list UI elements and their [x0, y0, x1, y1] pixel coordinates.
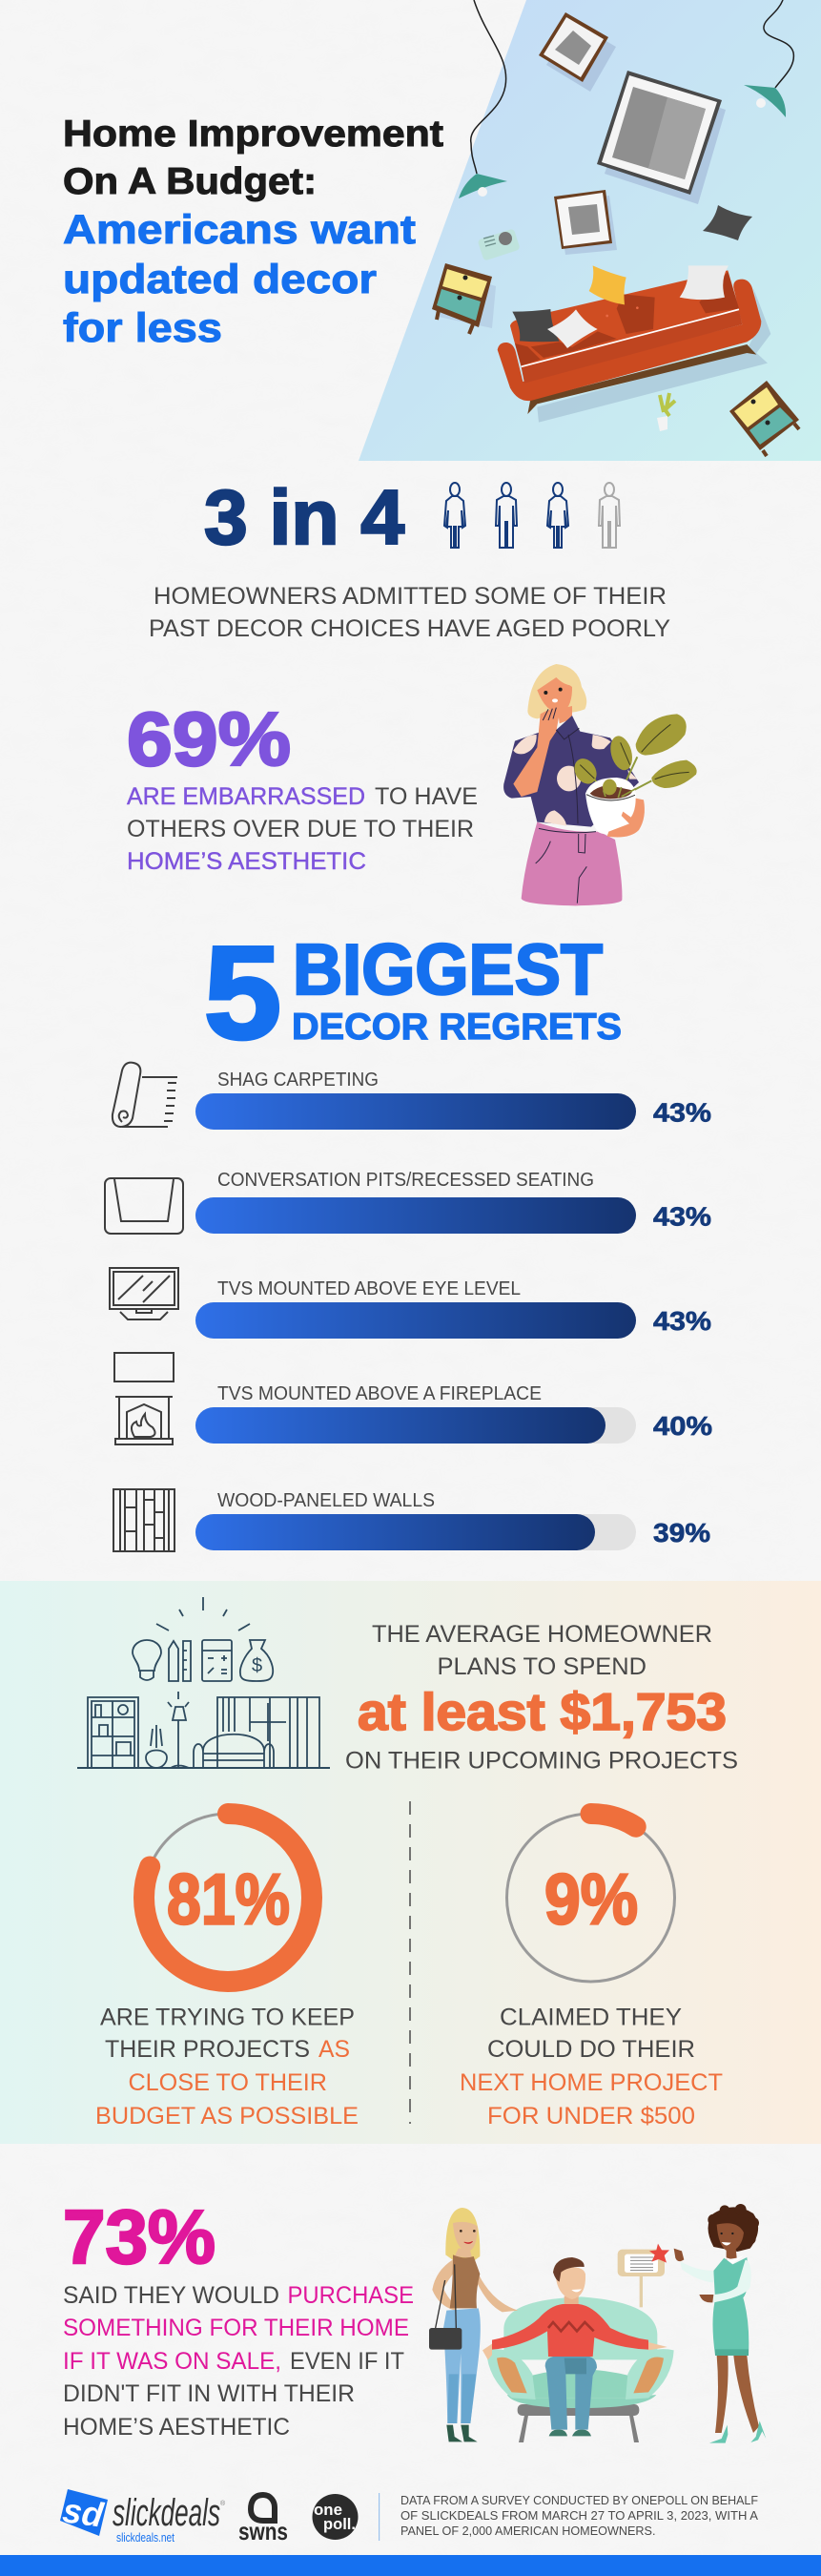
icon: yellow pillow: [589, 265, 626, 304]
text: purchase if on sale: EVEN IF IT: [290, 2348, 404, 2375]
icon: white cushion: [547, 309, 598, 348]
chart: decor regrets bars: [195, 1070, 712, 1550]
icon: cactus pot: [657, 393, 675, 431]
text: survey source: DATA FROM A SURVEY CONDUCTED BY ONEPOLL ON BEHALF: [400, 2494, 758, 2507]
text: next project under 500 dollars: FOR UNDER $500: [487, 2103, 695, 2129]
text: purchase if on sale: SOMETHING FOR THEIR HOME: [63, 2315, 409, 2341]
logo: onepoll: [313, 2494, 359, 2540]
illustration: budgeting and living room line art: [77, 1597, 330, 1768]
heading: 5 biggest decor regrets: DECOR REGRETS: [292, 1007, 622, 1048]
text: homeowners admitted: [149, 583, 670, 642]
logo: onepoll: poll.: [323, 2515, 356, 2533]
icon: sofa: [498, 265, 770, 423]
text: homeowners admitted: HOMEOWNERS ADMITTED SOME OF THEIR: [154, 583, 667, 610]
row: tvs above eye level: 43%: [653, 1306, 711, 1336]
text: purchase if on sale: IF IT WAS ON SALE,: [63, 2348, 281, 2375]
row: tvs above fireplace: 40%: [653, 1411, 712, 1441]
panel: budget band: [0, 1581, 821, 2144]
icon: saleswoman: [674, 2204, 766, 2443]
icon: right dresser: [729, 381, 799, 456]
text: survey source: [400, 2494, 759, 2538]
row: shag carpeting: SHAG CARPETING: [217, 1070, 379, 1091]
icon: left dresser: [432, 263, 496, 334]
text: keep projects close to budget: BUDGET AS POSSIBLE: [95, 2103, 359, 2129]
title: Home Improvement: [63, 114, 443, 155]
text: keep projects close to budget: AS: [318, 2036, 350, 2063]
text: next project under 500 dollars: CLAIMED THEY: [500, 2004, 682, 2030]
text: survey source: OF SLICKDEALS FROM MARCH 27 TO APRIL 3, 2023, WITH A: [400, 2509, 759, 2523]
heading: 5 biggest decor regrets: 5: [204, 920, 281, 1067]
icon: small tilted frame: [539, 12, 616, 92]
text: embarrassed: ARE EMBARRASSED: [127, 783, 365, 810]
title: Americans want: [63, 207, 416, 253]
title: for less: [63, 305, 222, 351]
icon: tv above fireplace: [114, 1353, 174, 1444]
stat: 3 in 4 heading: 3 in 4: [204, 475, 404, 561]
footer logos: [60, 2489, 759, 2545]
chart: 9 percent donut: [507, 1814, 675, 1982]
stat: 69 percent: 69%: [127, 696, 291, 781]
row: tvs above fireplace: [195, 1383, 712, 1444]
icon: left hanging lamp: [459, 0, 507, 198]
illustration: budgeting and living room line art: $: [252, 1655, 262, 1676]
row: wood paneled walls: [195, 1490, 710, 1550]
row: wood paneled walls: 39%: [653, 1518, 710, 1548]
text: keep projects close to budget: ARE TRYING TO KEEP: [100, 2004, 355, 2030]
chart: 81 percent donut: [144, 1814, 312, 1982]
text: purchase if on sale: DIDN'T FIT IN WITH THEIR: [63, 2380, 355, 2407]
title: updated decor: [63, 257, 377, 302]
stat: 73 percent: 73%: [63, 2194, 216, 2279]
text: purchase if on sale: [63, 2282, 414, 2441]
text: average homeowner plans: at least $1,753: [358, 1682, 727, 1741]
row: wood paneled walls: WOOD-PANELED WALLS: [217, 1490, 435, 1511]
logo: slickdeals: sd: [60, 2490, 107, 2535]
logo: onepoll: one: [314, 2501, 342, 2519]
text: average homeowner plans: ON THEIR UPCOMING PROJECTS: [345, 1748, 738, 1775]
title: On A Budget:: [63, 161, 317, 202]
row: tvs above eye level: TVS MOUNTED ABOVE EYE LEVEL: [217, 1278, 521, 1299]
logo: slickdeals: [60, 2489, 226, 2545]
icon: large tilted frame: [597, 71, 726, 204]
panel: hero illustration: [359, 0, 821, 461]
row: shag carpeting: [195, 1070, 711, 1130]
illustration: embarrassed woman with plant: [503, 664, 697, 905]
icon: dark cushion: [512, 309, 560, 342]
logo: swns: swns: [238, 2517, 288, 2545]
text: average homeowner plans: [345, 1621, 738, 1775]
icon: armchair: [486, 2296, 674, 2442]
row: conversation pits: [195, 1170, 711, 1234]
chart: 81 percent donut: 81%: [167, 1859, 290, 1939]
title: [63, 114, 443, 351]
row: tvs above fireplace: TVS MOUNTED ABOVE A FIREPLACE: [217, 1383, 542, 1404]
text: purchase if on sale: SAID THEY WOULD: [63, 2282, 279, 2309]
heading: 5 biggest decor regrets: BIGGEST: [293, 929, 603, 1009]
icon: blonde woman: [429, 2208, 518, 2441]
text: embarrassed: OTHERS OVER DUE TO THEIR: [127, 816, 474, 842]
icon: conversation pit: [105, 1178, 183, 1234]
icon: white pillow on sofa back: [680, 265, 729, 300]
text: embarrassed: [127, 783, 478, 875]
text: purchase if on sale: HOME’S AESTHETIC: [63, 2414, 290, 2441]
text: keep projects close to budget: CLOSE TO THEIR: [128, 2069, 327, 2096]
text: next project under 500 dollars: [460, 2004, 723, 2129]
icon: dark pillow: [703, 205, 752, 240]
icon: right hanging lamp: [744, 0, 793, 117]
logo: slickdeals: slickdeals: [113, 2492, 220, 2534]
icon: wood panels: [113, 1489, 174, 1551]
text: embarrassed: TO HAVE: [375, 783, 478, 810]
text: next project under 500 dollars: NEXT HOME PROJECT: [460, 2069, 723, 2096]
icon: medium frame: [554, 190, 617, 255]
text: average homeowner plans: PLANS TO SPEND: [437, 1653, 647, 1680]
illustration: furniture store scene: [429, 2204, 766, 2443]
icon: sale sign: [618, 2244, 669, 2307]
text: keep projects close to budget: THEIR PROJECTS: [105, 2036, 310, 2063]
text: homeowners admitted: PAST DECOR CHOICES HAVE AGED POORLY: [149, 615, 670, 642]
icon: television: [110, 1268, 178, 1319]
heading: 5 biggest decor regrets: [204, 920, 622, 1067]
logo: swns: [238, 2495, 288, 2545]
icon: row of four people: [444, 483, 620, 548]
icon: seated man: [482, 2257, 667, 2443]
icon: radio: [478, 228, 521, 261]
row: tvs above eye level: [195, 1278, 711, 1339]
logo: slickdeals: ®: [220, 2500, 226, 2507]
icon: rolled rug: [113, 1063, 177, 1127]
row: conversation pits: CONVERSATION PITS/RECESSED SEATING: [217, 1170, 594, 1191]
logo: slickdeals: slickdeals.net: [116, 2530, 174, 2545]
text: next project under 500 dollars: COULD DO THEIR: [487, 2036, 695, 2063]
text: embarrassed: HOME’S AESTHETIC: [127, 848, 366, 875]
chart: 9 percent donut: 9%: [544, 1859, 638, 1939]
text: purchase if on sale: PURCHASE: [288, 2282, 414, 2309]
row: conversation pits: 43%: [653, 1202, 711, 1231]
text: survey source: PANEL OF 2,000 AMERICAN HOMEOWNERS.: [400, 2524, 656, 2538]
text: average homeowner plans: THE AVERAGE HOMEOWNER: [372, 1621, 712, 1648]
row: shag carpeting: 43%: [653, 1097, 711, 1128]
text: keep projects close to budget: [95, 2004, 359, 2129]
